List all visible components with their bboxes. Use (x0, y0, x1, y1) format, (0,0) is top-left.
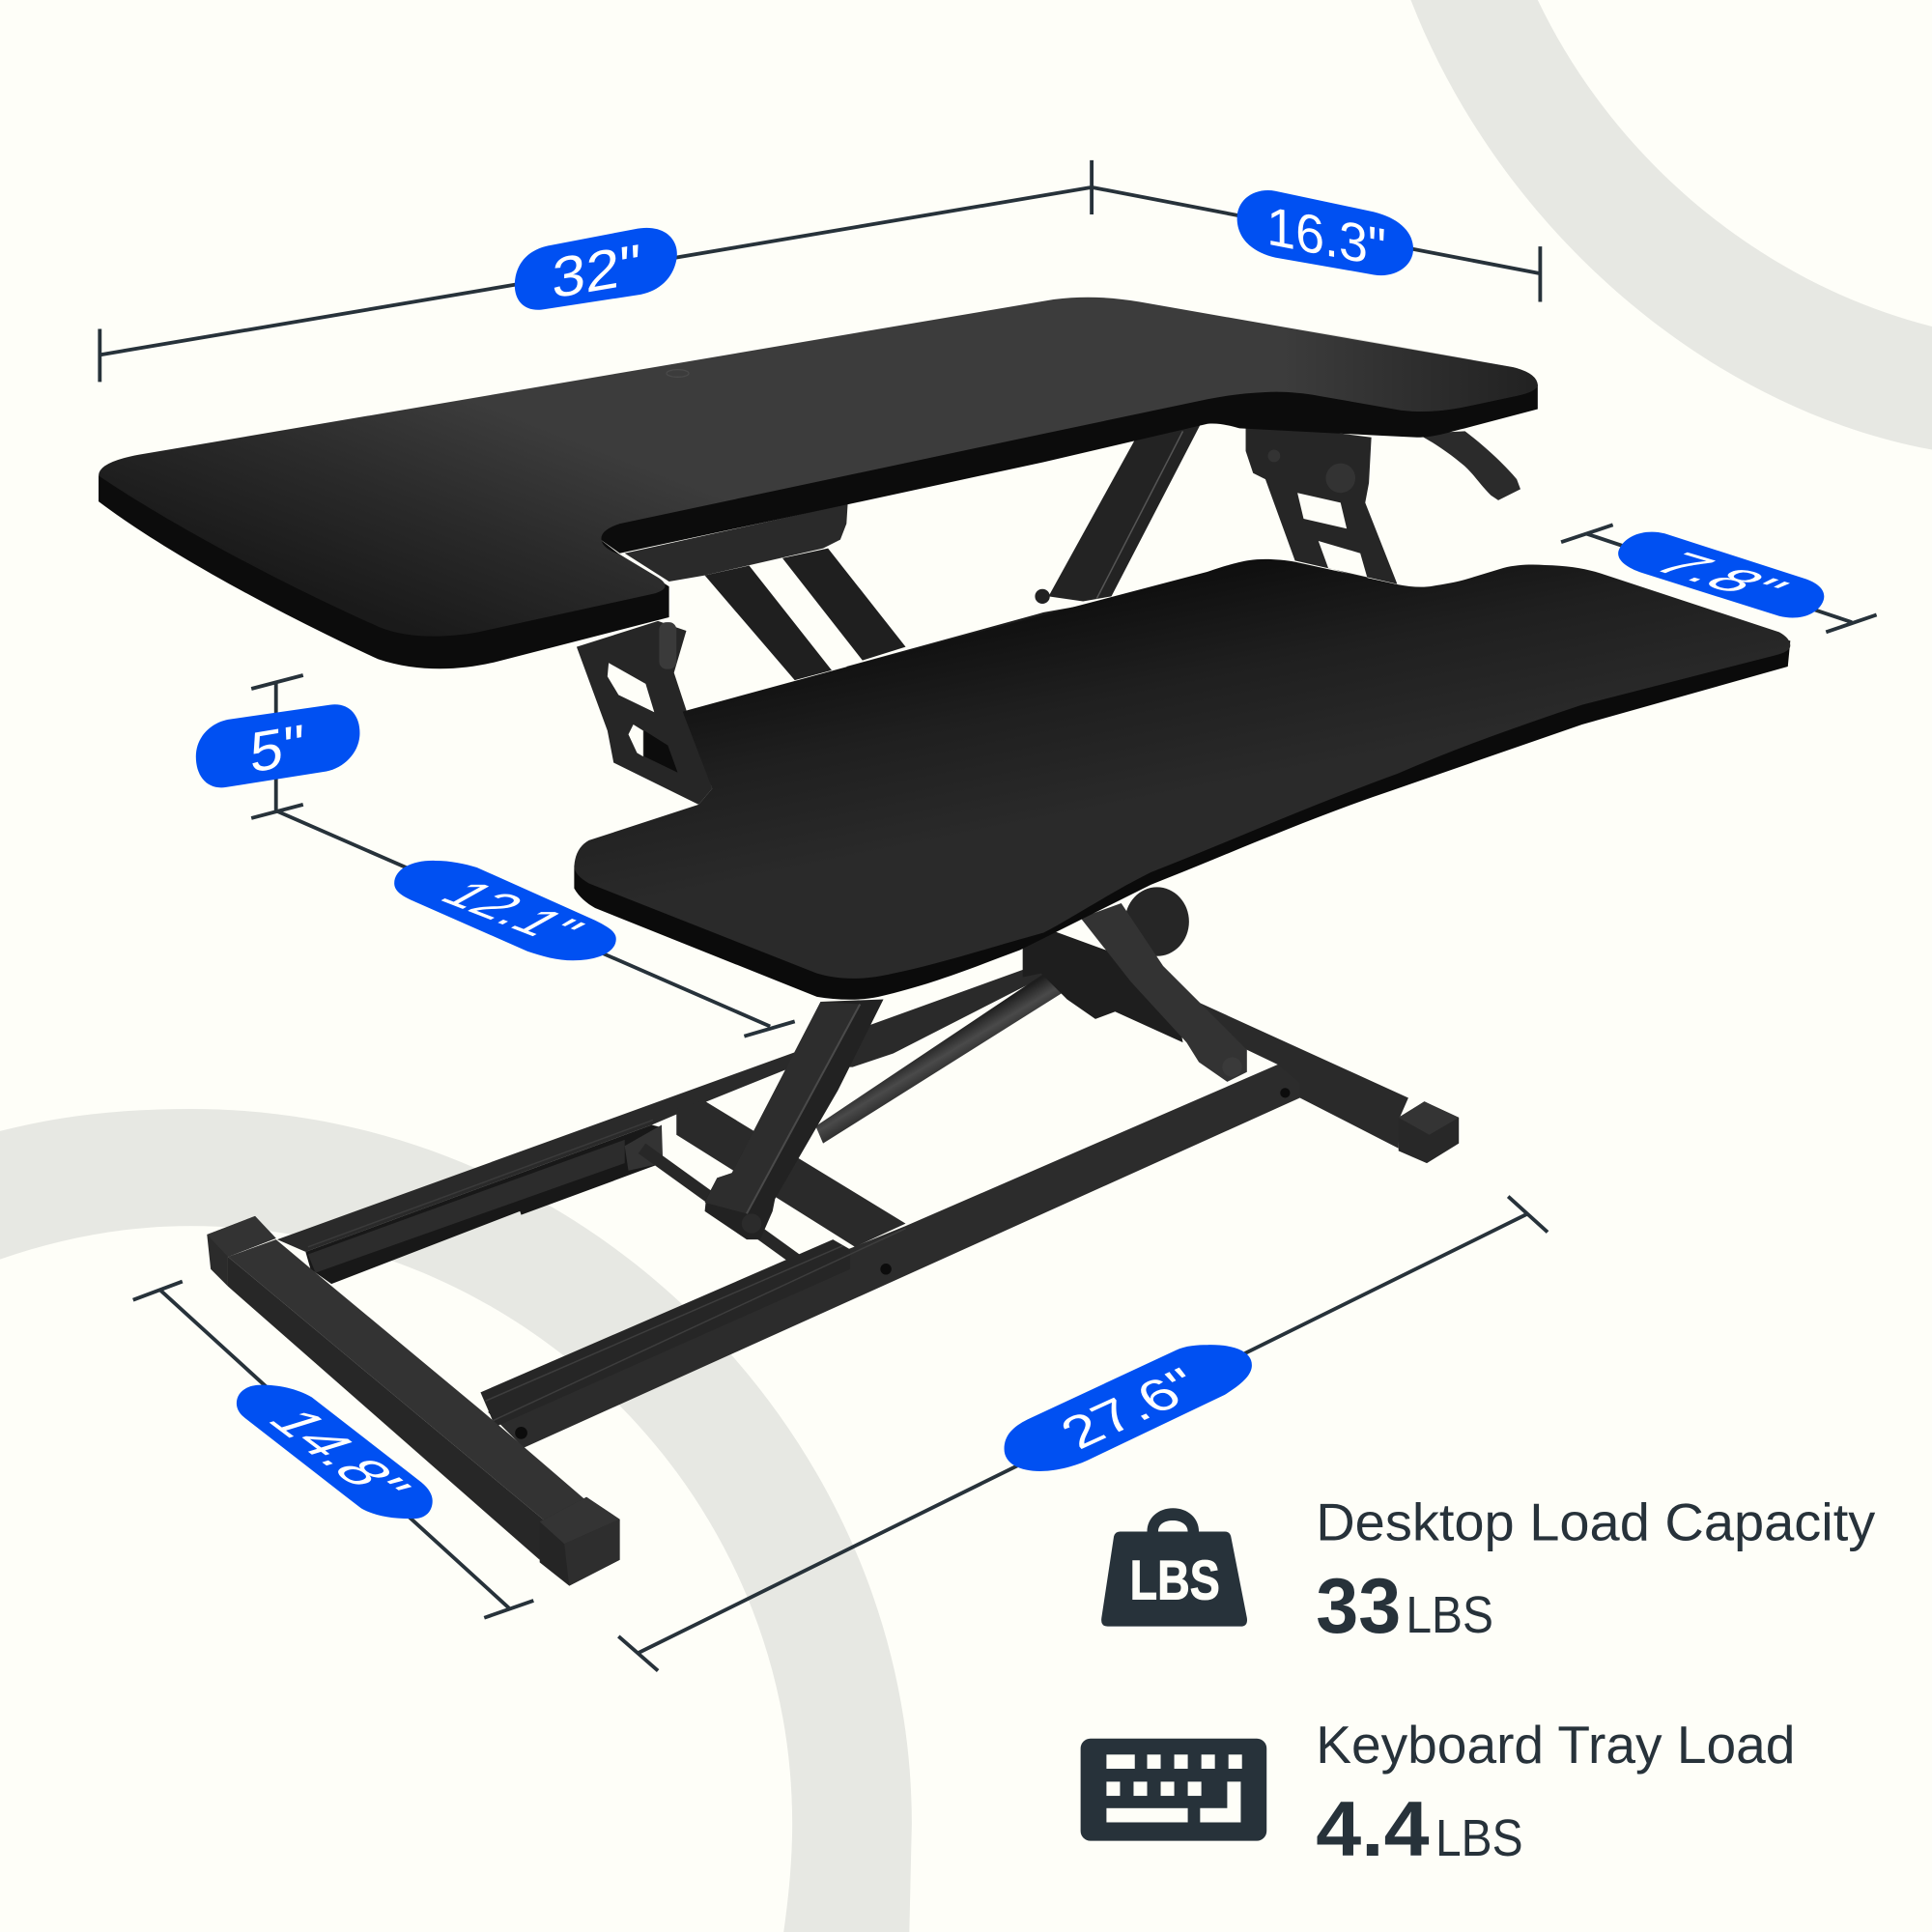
value: 4.4 LBS: LBS (1435, 1810, 1523, 1867)
dimension lines (99, 160, 1877, 1671)
pill: 32 inch width (515, 228, 677, 311)
back long rail (277, 963, 1060, 1284)
decorative arc top right (1410, 0, 1932, 450)
front cross bar (228, 1239, 586, 1560)
inner cross bar (676, 1100, 906, 1247)
pill: 7.8 inch tray depth: 7.8" (1637, 546, 1804, 606)
left knob (659, 622, 676, 669)
right bracket (1246, 421, 1397, 584)
grommet ring (667, 370, 689, 377)
upper mechanism cluster (1023, 931, 1182, 1042)
back foot (1399, 1101, 1459, 1163)
upper risers (577, 421, 1520, 805)
front left foot (207, 1216, 276, 1287)
value: 33 LBS (1316, 1563, 1493, 1650)
handle (1417, 431, 1520, 500)
tray edge (574, 616, 1790, 1000)
hinge disc (1125, 887, 1189, 956)
desktop right shading (1282, 326, 1538, 412)
value: 33 LBS: LBS (1406, 1587, 1493, 1644)
under block (625, 504, 848, 582)
left bracket inner slot (644, 730, 678, 773)
base frame (207, 887, 1459, 1586)
front long rail (480, 1065, 1300, 1448)
pill: 32 inch width: 32" (552, 233, 640, 311)
pill: 12.1 inch depth (394, 861, 616, 960)
tray rail (846, 599, 1120, 676)
label: keyboard tray load: Keyboard Tray Load (1316, 1715, 1795, 1775)
pill: 12.1 inch depth: 12.1" (426, 874, 598, 951)
rail holes (515, 1088, 1290, 1439)
diagonal strut (1035, 425, 1200, 604)
pill: 16.3 inch depth (1237, 190, 1413, 279)
right knobs (1267, 450, 1355, 493)
pill: 27.6 inch base length (1005, 1345, 1252, 1471)
pill: 5 inch height: 5" (250, 713, 304, 785)
icon: weight: LBS (1130, 1550, 1220, 1612)
pill: 16.3 inch depth: 16.3" (1266, 196, 1386, 279)
rear x-leg (1081, 903, 1247, 1082)
pill: 7.8 inch tray depth (1618, 532, 1824, 617)
tray surface (574, 559, 1790, 979)
desktop surface (99, 298, 1538, 637)
value: 33 LBS: 33 (1316, 1563, 1401, 1650)
upper desktop (99, 298, 1538, 668)
value: 4.4 LBS (1316, 1786, 1523, 1873)
gas cylinder (815, 952, 1110, 1144)
label: desktop load capacity: Desktop Load Capacity (1316, 1492, 1876, 1551)
pill: 5 inch height (196, 704, 359, 787)
decorative arc bottom left (0, 1109, 912, 1932)
desktop edge (99, 382, 1538, 668)
scissor arm left (705, 565, 832, 680)
pill: 14.8 inch base width: 14.8" (253, 1404, 426, 1505)
keyboard tray (574, 559, 1790, 1000)
value: 4.4 LBS: 4.4 (1316, 1786, 1430, 1873)
left bracket (577, 621, 712, 805)
back cross bar (1180, 998, 1408, 1149)
pill: 27.6 inch base length: 27.6" (1050, 1359, 1211, 1459)
lower x-leg (705, 999, 884, 1239)
inner rod (642, 1149, 801, 1263)
front right foot (540, 1497, 620, 1586)
scissor arm right (782, 549, 906, 661)
icon: keyboard (1081, 1739, 1266, 1841)
icon: weight (1101, 1508, 1247, 1627)
